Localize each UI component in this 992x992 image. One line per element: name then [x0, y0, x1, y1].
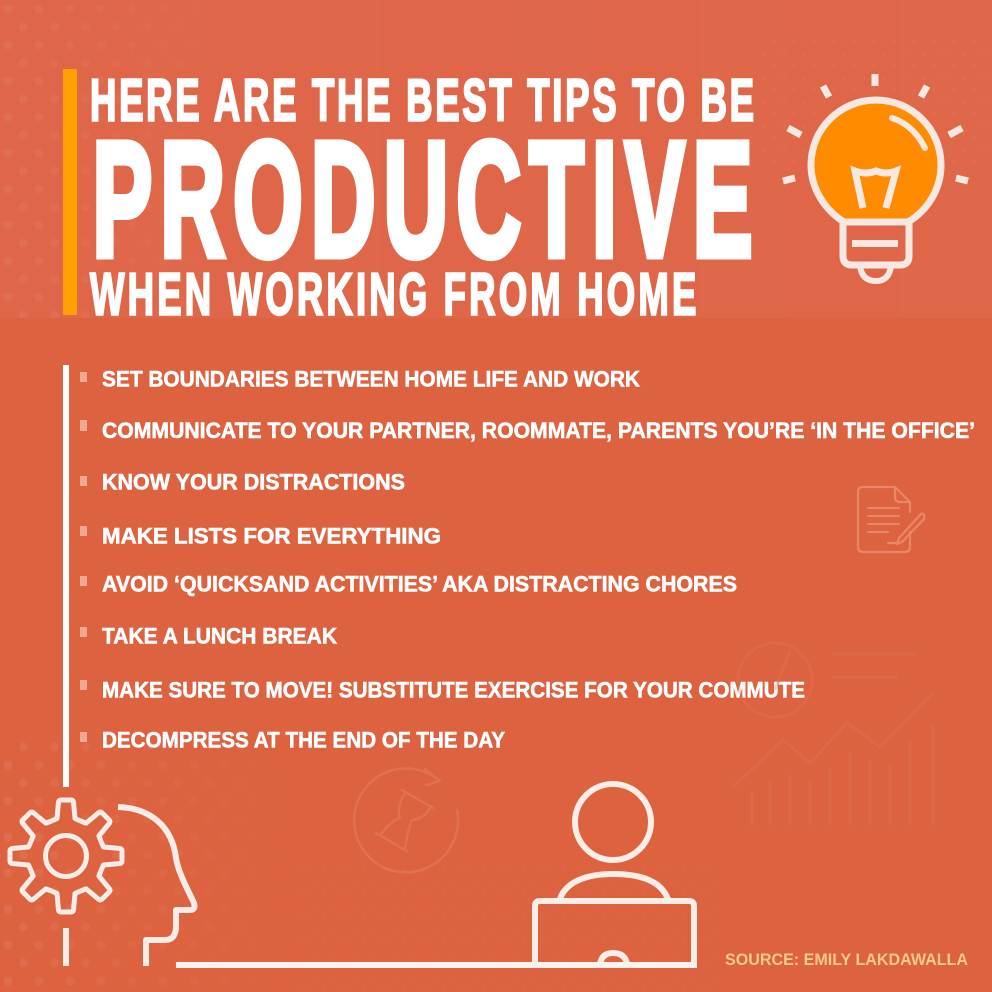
tip 5: AVOID ‘QUICKSAND ACTIVITIES’ AKA DISTRACTING CHORES	[102, 572, 737, 596]
desk line	[176, 962, 697, 968]
gear outline	[10, 800, 122, 912]
icon: faint magnifier and growth chart	[733, 643, 933, 825]
head profile	[118, 807, 194, 966]
icon: faint hourglass with circular arrow	[354, 768, 458, 872]
tip 3: KNOW YOUR DISTRACTIONS	[102, 470, 405, 494]
source credit: SOURCE: EMILY LAKDAWALLA	[725, 951, 968, 969]
bulb tip	[860, 266, 891, 281]
tip 8: DECOMPRESS AT THE END OF THE DAY	[102, 728, 505, 752]
bulb highlight	[892, 118, 925, 148]
title line 1: HERE ARE THE BEST TIPS TO BE	[90, 69, 754, 134]
title line 3: WHEN WORKING FROM HOME	[90, 263, 696, 328]
lower stem	[63, 928, 69, 966]
tip 7: MAKE SURE TO MOVE! SUBSTITUTE EXERCISE FOR YOUR COMMUTE	[102, 678, 805, 702]
bulb base line	[852, 240, 898, 247]
bulb base	[843, 222, 909, 265]
tips list	[80, 366, 975, 752]
person shoulders	[560, 874, 668, 899]
tip 4: MAKE LISTS FOR EVERYTHING	[102, 524, 441, 548]
vertical rule	[63, 365, 69, 787]
title	[90, 69, 754, 328]
tip 1: SET BOUNDARIES BETWEEN HOME LIFE AND WORK	[102, 366, 641, 392]
bulb glass	[811, 100, 941, 222]
laptop	[535, 901, 694, 965]
title line 2: PRODUCTIVE	[92, 108, 752, 290]
icon: faint document with pencil	[858, 487, 924, 552]
person head	[575, 784, 651, 860]
bulb filament	[855, 171, 896, 208]
icon: light bulb	[783, 74, 968, 281]
laptop notch	[600, 953, 627, 964]
tip 6: TAKE A LUNCH BREAK	[102, 624, 338, 648]
icon: gear and head	[10, 800, 194, 966]
icon: person at laptop	[535, 784, 694, 965]
accent bar	[63, 69, 77, 315]
bulb rays	[783, 74, 968, 181]
